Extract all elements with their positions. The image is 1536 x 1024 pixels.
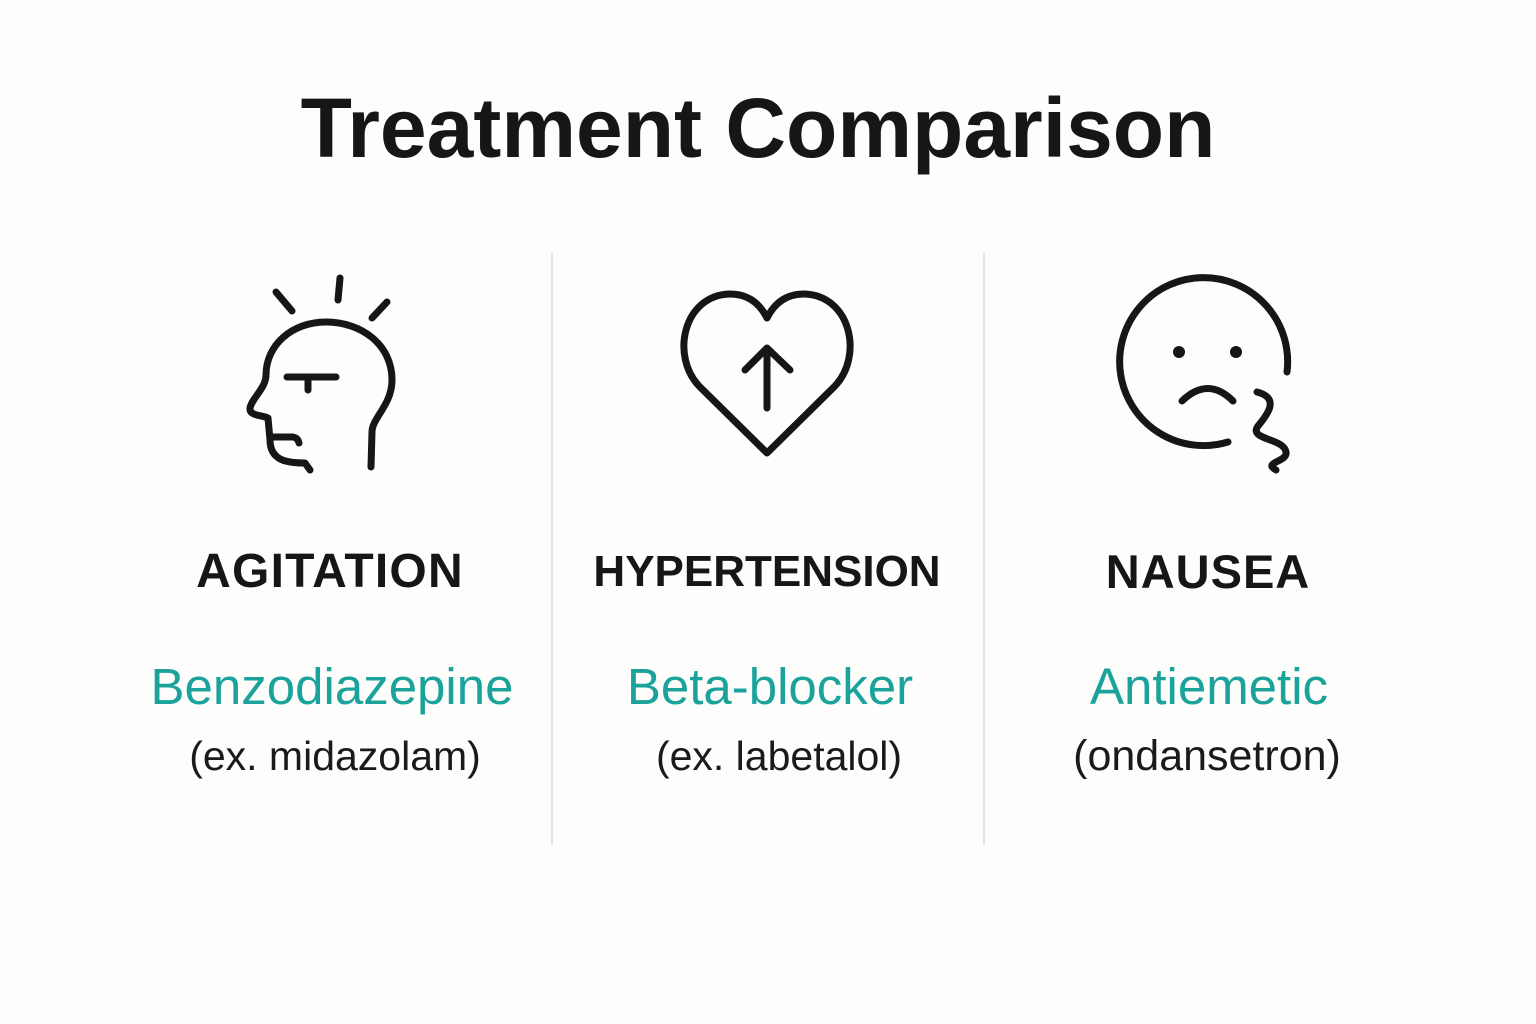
column 1: agitation [151,545,513,779]
example: ondansetron: (ondansetron) [1073,732,1341,780]
column 3: nausea [1073,545,1341,780]
drug: beta-blocker: Beta-blocker [627,658,913,715]
drug: antiemetic: Antiemetic [1090,658,1328,715]
icon: agitated head [250,278,392,470]
label: agitation: AGITATION [196,545,464,598]
icon: nauseous face [1120,278,1288,470]
label: hypertension: HYPERTENSION [593,547,941,596]
column 2: hypertension [593,547,941,779]
drug: benzodiazepine: Benzodiazepine [151,658,513,715]
icon: heart with up arrow [684,294,850,453]
example: labetalol: (ex. labetalol) [656,733,902,779]
title: Treatment Comparison [301,81,1215,175]
example: midazolam: (ex. midazolam) [189,733,481,779]
label: nausea: NAUSEA [1106,545,1310,598]
